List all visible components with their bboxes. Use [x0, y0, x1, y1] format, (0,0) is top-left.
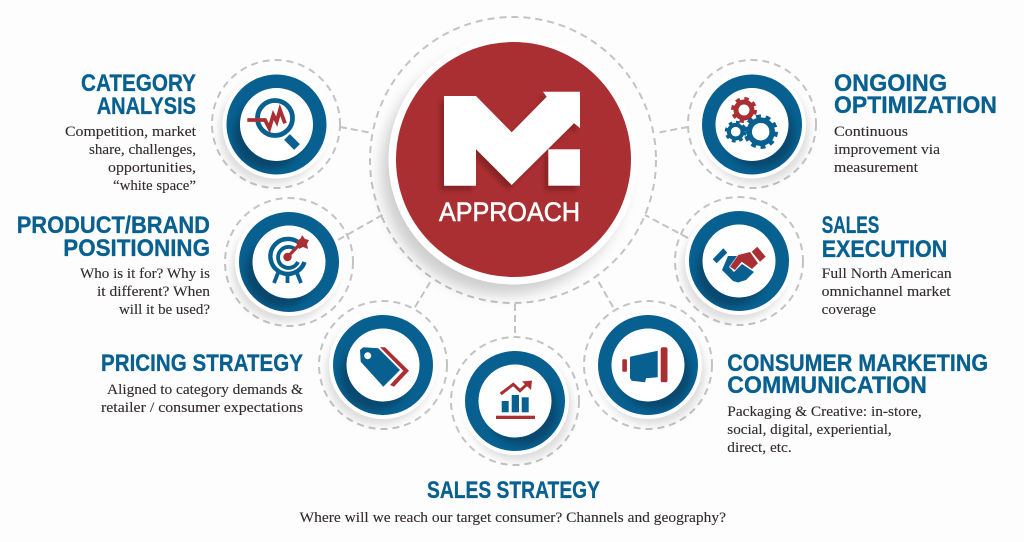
text block: ongoing optimization: Continuous	[834, 124, 908, 140]
text block: product brand positioning: it different? When	[97, 284, 211, 300]
text block: sales execution: coverage	[822, 302, 876, 318]
text block: category analysis: ANALYSIS	[97, 93, 196, 120]
text block: consumer marketing communication	[727, 350, 988, 456]
text block: category analysis: share, challenges,	[89, 142, 196, 158]
text block: sales execution: omnichannel market	[822, 284, 951, 300]
text block: category analysis: “white space”	[113, 178, 196, 194]
satellite: product brand positioning	[225, 198, 353, 326]
M logo with arrow	[440, 92, 580, 191]
satellite: sales execution	[675, 197, 803, 325]
text block: sales execution: SALES	[822, 212, 879, 239]
text block: sales strategy: Where will we reach our target consumer? Channels and geography?	[300, 510, 726, 526]
satellite: category analysis	[212, 60, 340, 188]
centre badge: M Approach	[370, 17, 656, 303]
dashed connectors between centre and satellites	[338, 127, 688, 337]
text block: sales strategy: SALES STRATEGY	[427, 477, 600, 504]
text block: ongoing optimization: measurement	[834, 160, 918, 176]
text block: ongoing optimization: improvement via	[834, 142, 941, 158]
text block: product brand positioning: PRODUCT/BRAND	[17, 212, 210, 239]
text block: consumer marketing communication: social, digital, experiential,	[727, 422, 892, 438]
text block: product brand positioning: Who is it for? Why is	[80, 266, 210, 282]
icon: magnifier with chart line	[247, 100, 297, 147]
text block: consumer marketing communication: Packaging & Creative: in-store,	[727, 404, 922, 420]
text block: category analysis: Competition, market	[65, 124, 196, 140]
text block: sales execution: Full North American	[822, 266, 952, 282]
text block: sales execution: EXECUTION	[822, 236, 947, 263]
text block: product brand positioning: will it be used?	[119, 302, 210, 318]
text block: ongoing optimization	[834, 70, 997, 176]
icon: rising bar chart	[496, 380, 535, 419]
text block: product brand positioning	[17, 212, 211, 318]
icon: target with dart	[270, 235, 309, 283]
text block: category analysis	[65, 70, 196, 194]
icon: megaphone	[622, 347, 668, 382]
text block: ongoing optimization: ONGOING	[834, 70, 947, 97]
approach label: APPROACH	[439, 197, 580, 227]
text block: pricing strategy	[101, 350, 304, 416]
text block: pricing strategy: Aligned to category demands &	[107, 382, 304, 398]
text block: consumer marketing communication: COMMUNICATION	[727, 372, 927, 399]
text block: category analysis: CATEGORY	[81, 70, 196, 97]
satellite: consumer marketing communication	[584, 301, 712, 429]
text block: sales execution	[822, 212, 952, 318]
icon: handshake	[713, 247, 766, 282]
text block: category analysis: opportunities,	[108, 160, 196, 176]
satellite: sales strategy	[451, 337, 579, 465]
text block: pricing strategy: PRICING STRATEGY	[101, 350, 303, 377]
satellite: ongoing optimization	[688, 60, 816, 188]
text block: product brand positioning: POSITIONING	[63, 235, 210, 262]
text block: consumer marketing communication: CONSUMER MARKETING	[727, 350, 988, 377]
text block: pricing strategy: retailer / consumer expectations	[101, 400, 303, 416]
text block: ongoing optimization: OPTIMIZATION	[834, 92, 997, 119]
icon: gears	[726, 98, 776, 147]
satellite: pricing strategy	[319, 301, 447, 429]
text block: sales strategy	[300, 477, 726, 526]
text block: consumer marketing communication: direct, etc.	[727, 440, 792, 456]
icon: price tag	[360, 347, 409, 387]
